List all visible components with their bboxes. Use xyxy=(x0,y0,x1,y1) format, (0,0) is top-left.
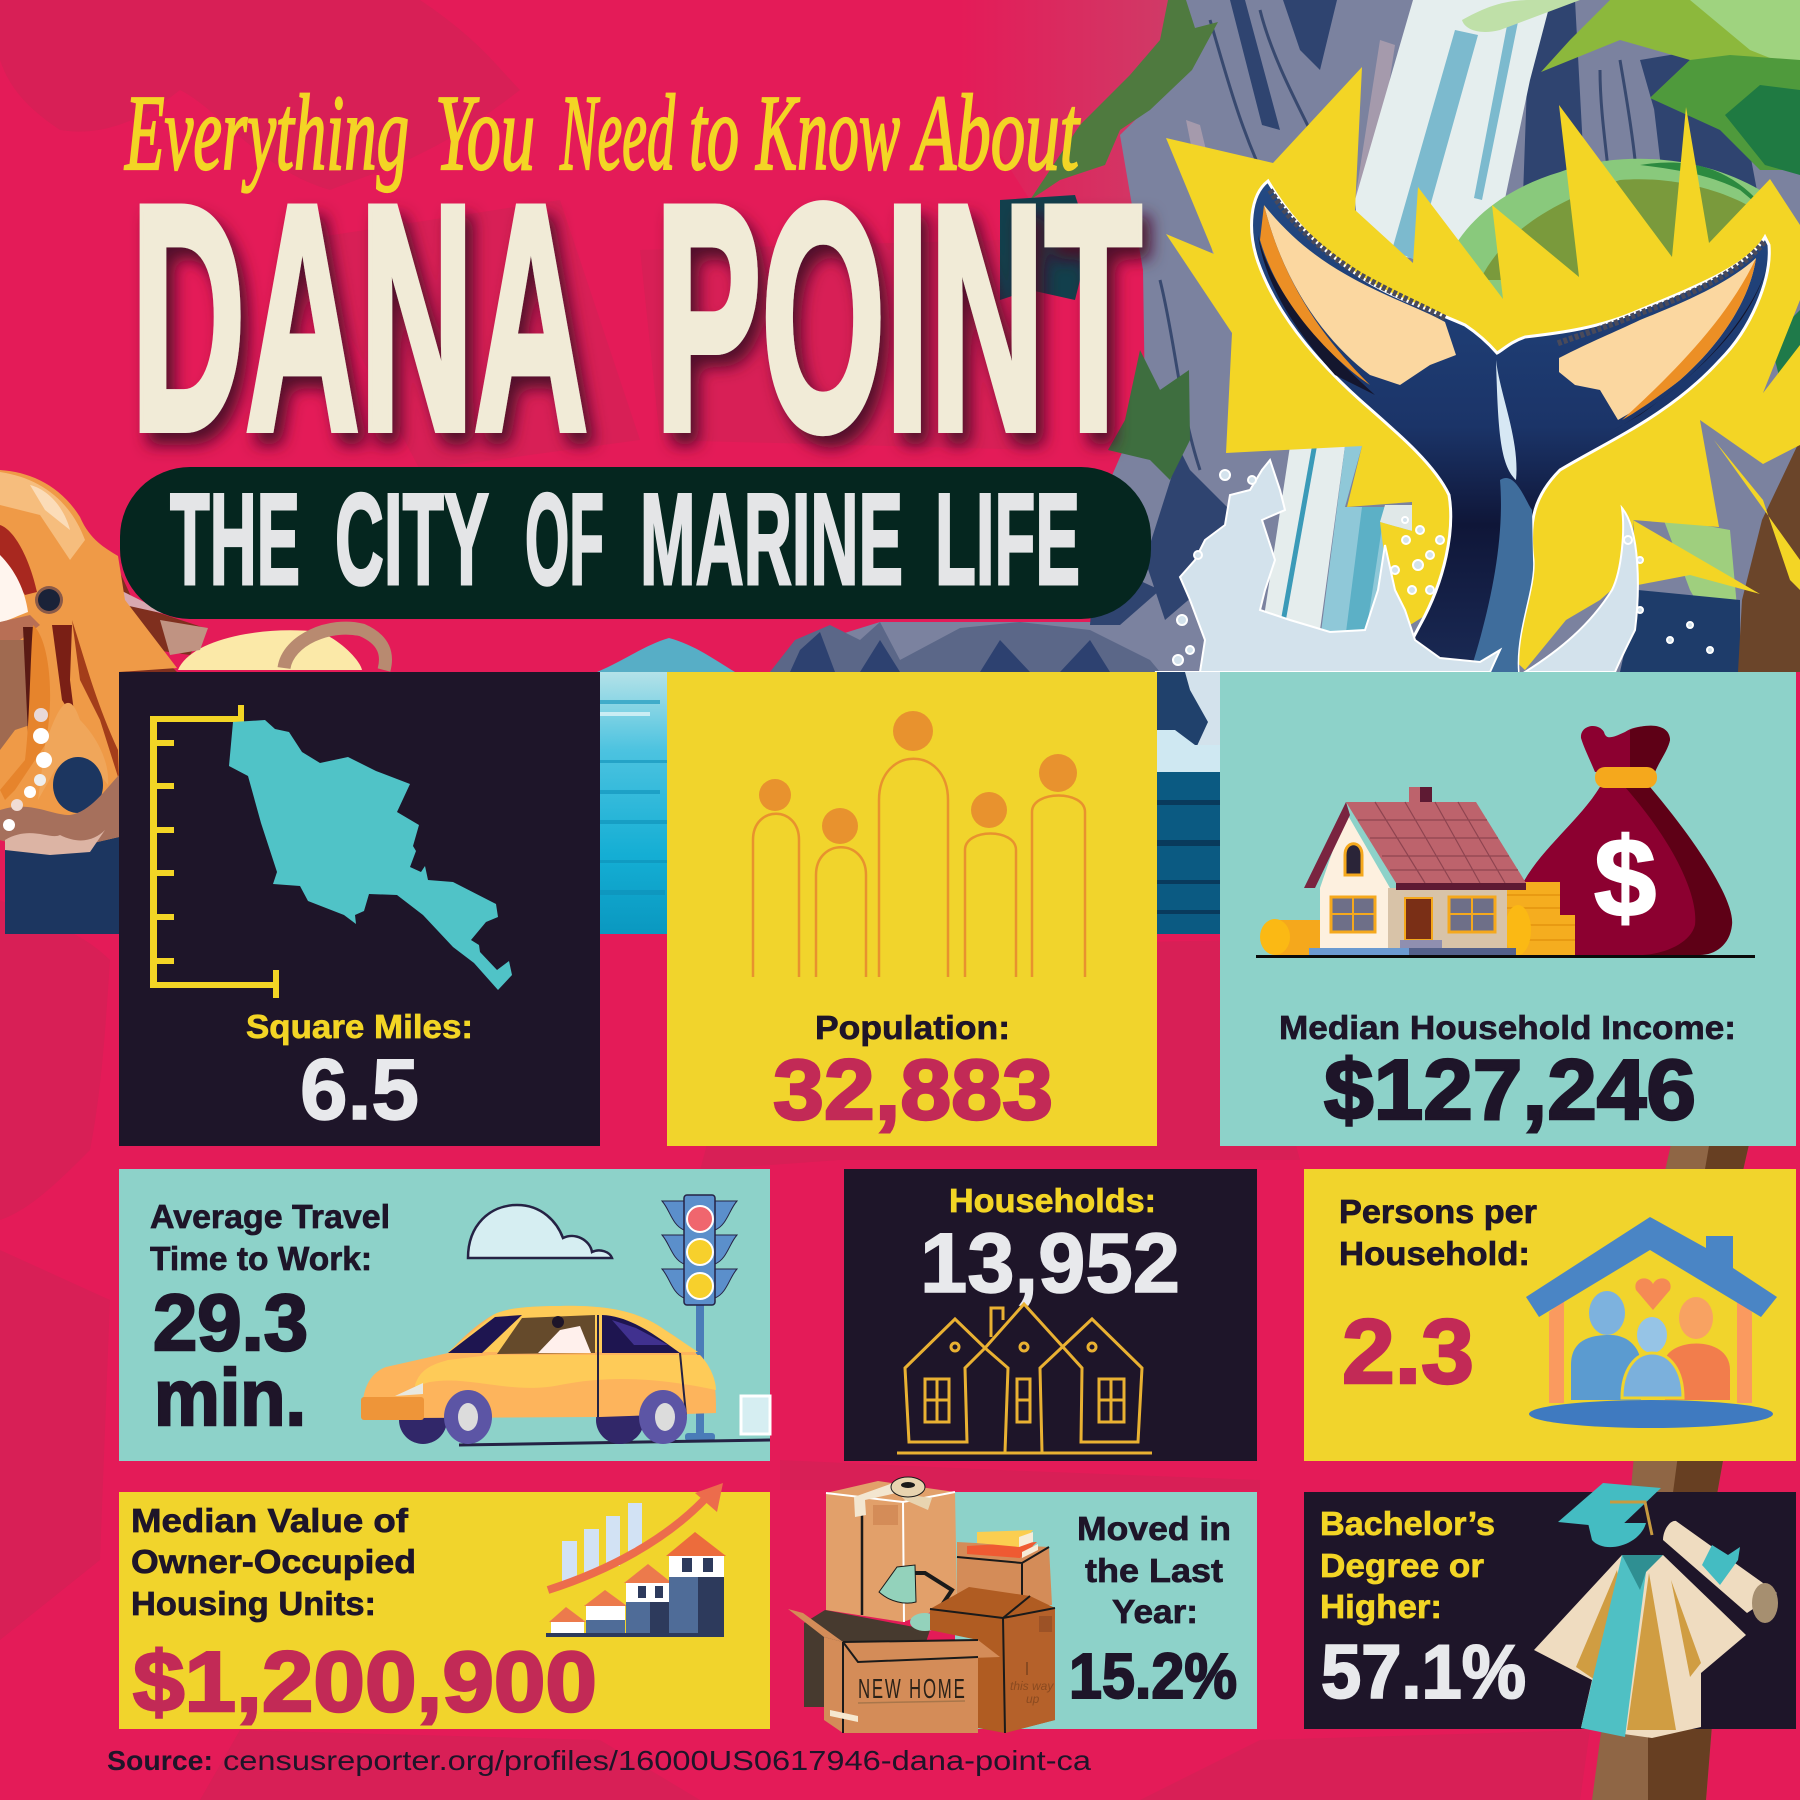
subtitle script: Need xyxy=(559,74,676,193)
yellow starburst xyxy=(1166,67,1800,670)
label: Moved in xyxy=(1077,1510,1231,1547)
icon: family house xyxy=(1526,1217,1777,1428)
value: 29.3 xyxy=(153,1278,308,1367)
icon: traffic light xyxy=(662,1195,737,1441)
icon: moving boxes: NEW HOME xyxy=(858,1673,965,1704)
label: Median Value of xyxy=(131,1502,409,1539)
palm fronds and hill xyxy=(1444,0,1800,672)
icon: moving boxes: up xyxy=(1026,1692,1040,1706)
value: 6.5 xyxy=(300,1042,419,1138)
icon: rising chart and houses xyxy=(546,1483,726,1637)
tagline pill: CITY xyxy=(335,466,489,612)
icon: graduation gown xyxy=(1534,1483,1778,1738)
panel: population xyxy=(667,672,1157,1146)
subtitle script xyxy=(124,74,1081,193)
label xyxy=(150,1198,390,1277)
subtitle script: You xyxy=(435,74,535,193)
value: $127,246 xyxy=(1324,1043,1696,1138)
label: Square Miles: xyxy=(246,1008,473,1045)
label xyxy=(131,1502,416,1622)
panel: median household income xyxy=(1220,672,1796,1146)
icon: money bag xyxy=(1522,726,1732,955)
panel: median value xyxy=(119,1483,770,1730)
icon: car xyxy=(361,1306,770,1445)
subtitle script: Everything xyxy=(124,74,409,193)
value: $1,200,900 xyxy=(133,1635,597,1730)
label: the Last xyxy=(1085,1552,1223,1589)
label: Average Travel xyxy=(150,1198,390,1235)
icon: house and coins xyxy=(1260,787,1575,956)
label xyxy=(1339,1193,1537,1272)
tagline pill: THE xyxy=(170,466,300,612)
scenery: cliffs and waterfall xyxy=(770,0,1800,672)
value: 2.3 xyxy=(1342,1301,1474,1403)
water splash xyxy=(1155,460,1713,772)
label: Housing Units: xyxy=(131,1585,376,1622)
label: Higher: xyxy=(1320,1588,1442,1625)
panel: moved in the last year xyxy=(788,1477,1257,1733)
label: Time to Work: xyxy=(150,1240,372,1277)
label: Year: xyxy=(1112,1593,1198,1630)
subtitle script: to xyxy=(689,74,739,193)
value xyxy=(153,1278,308,1442)
icon: moving boxes: this way xyxy=(1010,1679,1054,1693)
label: Median Household Income: xyxy=(1279,1009,1736,1046)
panel: persons per household xyxy=(1304,1169,1796,1461)
foliage on the cliff xyxy=(1000,0,1218,480)
palm trunk xyxy=(1592,1140,1750,1800)
label xyxy=(1077,1510,1231,1630)
value: min. xyxy=(154,1353,306,1442)
panel: bachelor's degree xyxy=(1304,1483,1796,1738)
label: Population: xyxy=(815,1009,1010,1046)
tagline pill: LIFE xyxy=(935,466,1080,612)
value: 57.1% xyxy=(1321,1630,1526,1715)
label xyxy=(1320,1505,1495,1625)
label: Owner-Occupied xyxy=(131,1543,416,1580)
icon: moving boxes xyxy=(788,1477,1055,1733)
icon: scale ruler xyxy=(150,705,279,998)
icon: houses xyxy=(897,1304,1152,1453)
icon: people xyxy=(753,711,1085,977)
label: Degree or xyxy=(1320,1547,1484,1584)
subtitle script: About xyxy=(910,74,1081,193)
source: censusreporter.org/profiles/16000US0617946-dana-point-ca xyxy=(223,1745,1091,1776)
panel: square miles xyxy=(119,672,600,1146)
value: 32,883 xyxy=(773,1043,1053,1138)
tagline pill xyxy=(120,466,1151,619)
map of Dana Point xyxy=(229,720,512,990)
source: Source: xyxy=(107,1745,213,1776)
whale tail xyxy=(1252,181,1769,672)
subtitle script: Know xyxy=(755,74,900,193)
tagline pill: MARINE xyxy=(640,466,903,612)
value: 15.2% xyxy=(1069,1640,1237,1712)
panel: average travel time xyxy=(119,1169,770,1461)
panel: households xyxy=(844,1169,1257,1461)
icon: cloud xyxy=(468,1205,612,1258)
label: Persons per xyxy=(1339,1193,1537,1230)
label: Bachelor’s xyxy=(1320,1505,1495,1542)
label: Household: xyxy=(1339,1235,1530,1272)
octopus xyxy=(0,470,385,855)
label: Households: xyxy=(949,1182,1156,1219)
value: 13,952 xyxy=(920,1216,1180,1310)
text: POINT xyxy=(655,139,1142,498)
ocean bands xyxy=(5,638,1223,934)
icon: money bag: $ xyxy=(1594,815,1656,940)
title: DANA xyxy=(131,139,588,498)
tagline pill: OF xyxy=(525,466,604,612)
